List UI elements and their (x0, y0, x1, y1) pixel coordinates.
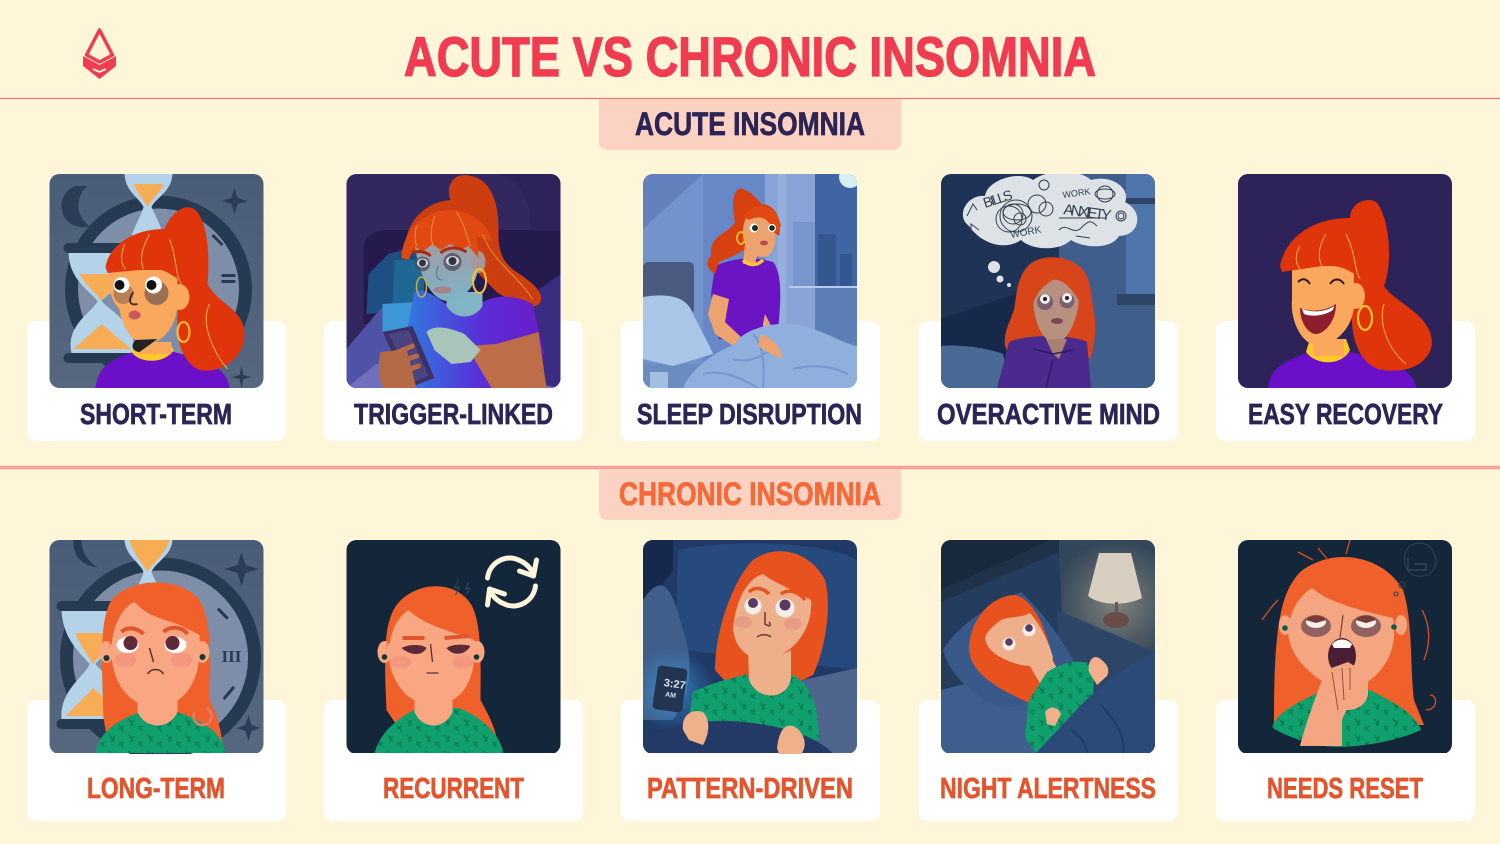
icon: refresh cycle (488, 558, 536, 606)
illustration: woman awake in bed with phone at 3:27 (631, 540, 857, 754)
thought cloud with worry words: WORK (1010, 225, 1042, 241)
card: recurrent: RECURRENT (383, 773, 524, 805)
card: night alertness (918, 540, 1179, 821)
card: overactive mind (918, 172, 1178, 441)
illustration: hourglass and clock, ponytail woman (50, 174, 264, 388)
card: pattern-driven (620, 540, 880, 821)
thought cloud with worry words: ANXIETY (1062, 201, 1112, 225)
illustration: woman with anxious thought cloud (941, 172, 1155, 388)
card: sleep disruption: SLEEP DISRUPTION (637, 399, 862, 431)
illustration: clock, hourglass and frowning woman (50, 540, 264, 753)
illustration: exhausted woman yawning (1238, 540, 1452, 753)
thought cloud with worry words (963, 172, 1137, 248)
card: sleep disruption (620, 166, 880, 441)
illustration: woman awake in bed with phone at 3:27: 3:27 (663, 677, 686, 692)
section heading: chronic insomnia: CHRONIC INSOMNIA (619, 476, 881, 512)
thought cloud with worry words: BILLS (981, 186, 1014, 211)
card: long-term (27, 540, 286, 821)
card: short-term: SHORT-TERM (80, 399, 232, 431)
card: easy recovery (1216, 174, 1475, 441)
illustration: woman awake in bed with phone at 3:27: AM (665, 691, 677, 700)
section heading: acute insomnia (599, 99, 901, 150)
illustration: woman looking at phone in bed (346, 174, 560, 388)
illustration: relieved woman smiling (1238, 174, 1452, 388)
card: needs reset (1216, 540, 1475, 821)
illustration: clock, hourglass and frowning woman: III (222, 647, 242, 666)
card: overactive mind: OVERACTIVE MIND (937, 399, 1160, 431)
hair back (404, 175, 541, 307)
card: recurrent (324, 540, 583, 821)
card: trigger-linked: TRIGGER-LINKED (354, 399, 553, 431)
card: pattern-driven: PATTERN-DRIVEN (647, 773, 853, 805)
card: trigger-linked (324, 174, 583, 441)
illustration: woman lying awake beside a lamp (941, 540, 1179, 753)
card: short-term (27, 174, 286, 441)
illustration: woman sitting up in bed (643, 166, 861, 388)
section heading: acute insomnia: ACUTE INSOMNIA (635, 106, 865, 142)
icon: bedside lamp (1088, 553, 1142, 628)
thought bubbles (988, 261, 1011, 287)
card: needs reset: NEEDS RESET (1267, 773, 1423, 805)
logo icon (83, 30, 116, 79)
title: ACUTE VS CHRONIC INSOMNIA (404, 25, 1096, 88)
card: night alertness: NIGHT ALERTNESS (940, 773, 1156, 805)
section heading: chronic insomnia (599, 469, 901, 520)
card: easy recovery: EASY RECOVERY (1248, 399, 1443, 431)
card: long-term: LONG-TERM (87, 773, 225, 805)
illustration: annoyed woman with refresh cycle icon (346, 540, 560, 753)
thought cloud with worry words: WORK (1062, 186, 1091, 200)
arms and phone (466, 332, 546, 388)
